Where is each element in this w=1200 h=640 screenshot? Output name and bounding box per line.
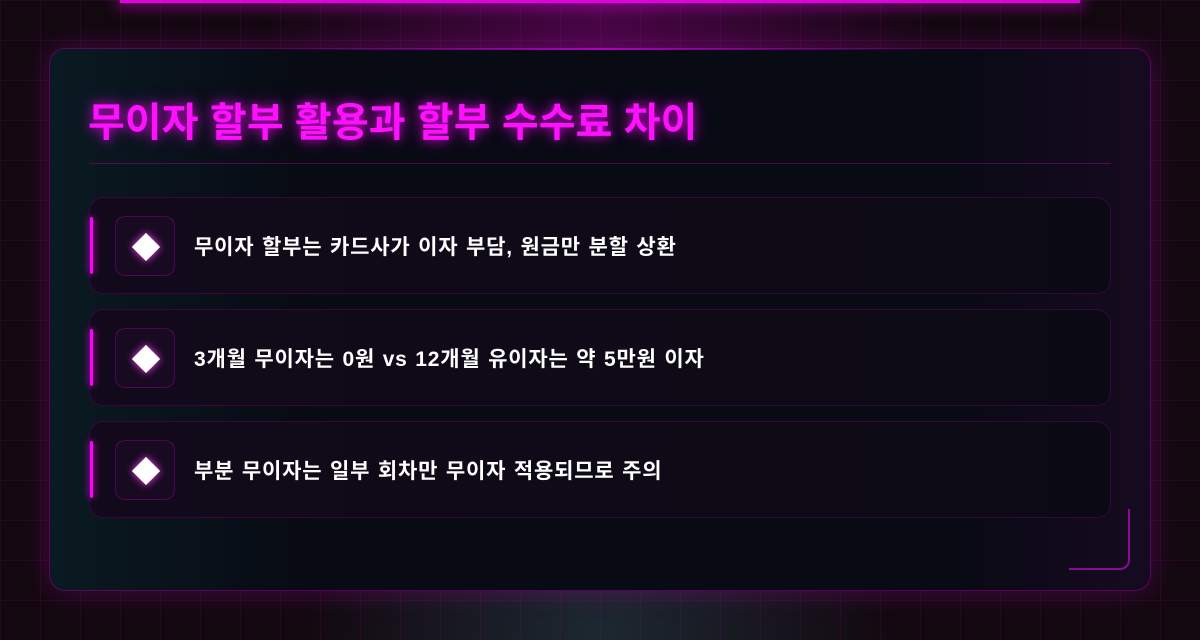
corner bracket [1069, 509, 1130, 570]
text 2: 3개월 무이자는 0원 vs 12개월 유이자는 약 5만원 이자 [194, 348, 705, 371]
icon: diamond [115, 328, 175, 388]
icon: diamond [115, 440, 175, 500]
text 1: 무이자 할부는 카드사가 이자 부담, 원금만 분할 상환 [194, 236, 677, 259]
title: 무이자 할부 활용과 할부 수수료 차이 [88, 101, 698, 145]
item 1 [89, 197, 1111, 294]
panel: main card [49, 48, 1151, 591]
item 3 [89, 421, 1111, 518]
item 2 [89, 309, 1111, 406]
icon: diamond [115, 216, 175, 276]
text 3: 부분 무이자는 일부 회차만 무이자 적용되므로 주의 [194, 460, 662, 483]
